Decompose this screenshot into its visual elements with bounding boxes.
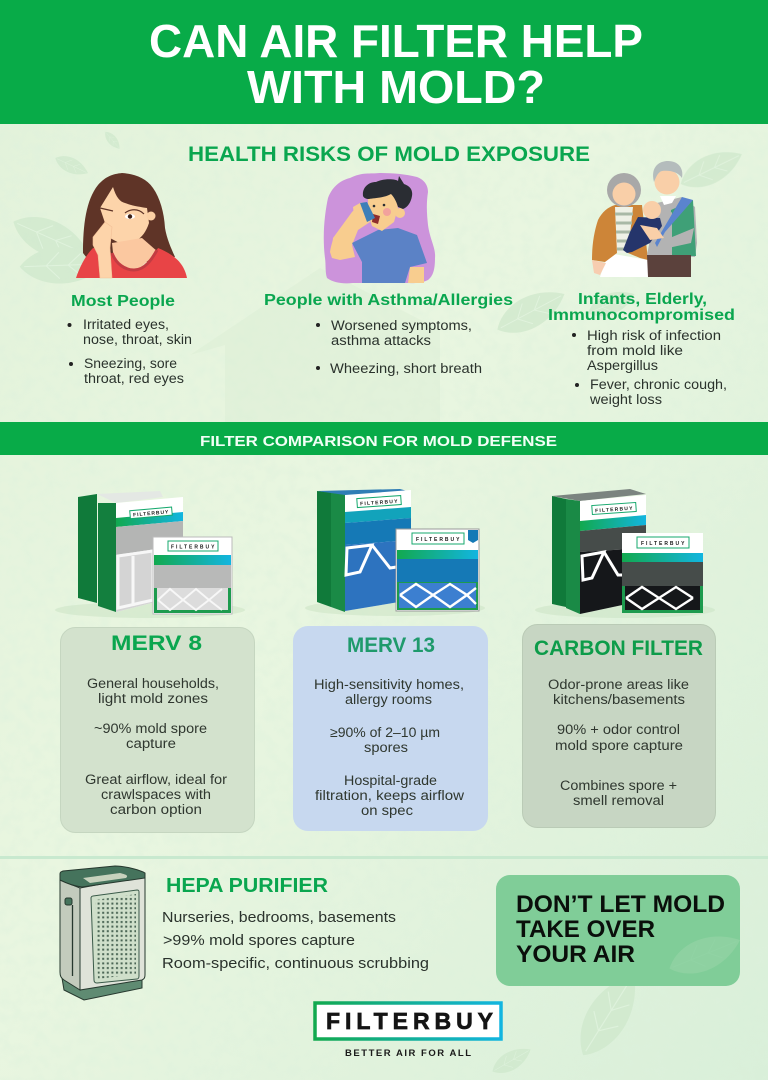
card text: merv 8 [85,676,228,817]
bullet list: vulnerable groups: weight loss [589,392,662,407]
bullet list: most people: throat, red eyes [84,371,184,386]
card text: merv 8: ~90% mold spore [94,721,207,736]
card text: merv 8: carbon option [110,802,202,817]
bullet list: vulnerable groups: Fever, chronic cough, [590,377,727,392]
card text: carbon filter: 90% + odor control [557,722,680,737]
callout: don't let mold take over your air: DON’T LET MOLD [516,891,725,918]
card text: merv 13: Hospital-grade [344,773,437,788]
card text: carbon filter: Combines spore + [560,778,677,793]
card text: merv 8: light mold zones [98,691,208,706]
panel: hepa purifier text [162,875,429,972]
logo: filterbuy: FILTERBUY [326,1008,493,1034]
label: most people: Most People [71,293,175,310]
band heading: FILTER COMPARISON FOR MOLD DEFENSE [200,433,557,450]
card text: carbon filter: kitchens/basements [553,692,685,707]
faint house silhouette [190,268,440,422]
bullet list: vulnerable groups: Aspergillus [587,358,658,373]
header banner [0,0,768,124]
bullet list: most people [68,317,192,386]
product shadows [55,600,715,618]
product image: merv 8 filters: FILTERBUY [171,544,215,550]
heading: health risks: HEALTH RISKS OF MOLD EXPOSURE [188,143,590,166]
label: infants, elderly, immunocompromised: Immunocompromised [548,307,735,324]
bullet list: asthma: Wheezing, short breath [330,361,482,376]
bullet list: asthma: Worsened symptoms, [331,318,472,333]
product image: merv 13 filters: FILTERBUY [360,499,398,507]
card text: merv 13: spores [364,740,408,755]
list: hepa benefits: Nurseries, bedrooms, basements [162,910,396,926]
panel: carbon filter [522,624,716,828]
bullet list: vulnerable groups [572,328,727,407]
card text: merv 13: ≥90% of 2–10 µm [330,725,440,740]
bullet list: most people: nose, throat, skin [83,332,192,347]
card text: carbon filter: Odor-prone areas like [548,677,689,692]
title: CAN AIR FILTER HELP [149,15,643,67]
card text: merv 13 [314,677,464,818]
card text: merv 8: General households, [87,676,219,691]
card text: merv 13: filtration, keeps airflow [315,788,464,803]
product image: carbon filters: FILTERBUY [641,541,685,547]
panel: infants, elderly, immunocompromised [548,161,735,407]
icon: grandparents with baby [592,161,697,277]
bullet list: vulnerable groups: High risk of infection [587,328,721,343]
heading: merv 8: MERV 8 [111,632,202,655]
section band: filter comparison [0,422,768,455]
icon: boy with inhaler [324,173,435,283]
bullet list: asthma: asthma attacks [331,333,431,348]
list: hepa benefits: Room-specific, continuous scrubbing [162,956,429,972]
product image: carbon filters: FILTERBUY [595,506,633,514]
heading: carbon filter: CARBON FILTER [534,637,703,660]
logo: filterbuy: BETTER AIR FOR ALL [345,1048,471,1059]
panel: most people [68,173,192,386]
callout: don't let mold take over your air: YOUR AIR [516,941,635,968]
bullet list: most people: Irritated eyes, [83,317,169,332]
card text: merv 8: Great airflow, ideal for [85,772,228,787]
card text: merv 8: capture [126,736,176,751]
product image: merv 13 filters: FILTERBUY [416,537,460,543]
product image: merv 13 filters [317,489,479,612]
panel: people with asthma [264,173,513,376]
label: people with asthma/allergies: People with Asthma/Allergies [264,292,513,309]
card text: merv 13: on spec [361,803,413,818]
card text: carbon filter [548,677,689,808]
heading: merv 13: MERV 13 [347,634,435,657]
card text: merv 13: High-sensitivity homes, [314,677,464,692]
panel: merv 8 [60,628,254,832]
card text: carbon filter: smell removal [573,793,664,808]
panel: merv 13 [293,626,488,831]
divider [0,856,768,859]
callout: don't let mold take over your air: TAKE OVER [516,916,655,943]
heading: hepa purifier: HEPA PURIFIER [166,875,329,897]
bullet list: vulnerable groups: from mold like [587,343,683,358]
card text: merv 13: allergy rooms [345,692,432,707]
bullet list: most people: Sneezing, sore [84,356,177,371]
icon: hepa air purifier [60,866,145,1000]
bullet list: asthma [316,318,482,376]
list: hepa benefits: >99% mold spores capture [163,933,355,949]
card text: carbon filter: mold spore capture [555,738,683,753]
product image: merv 8 filters: FILTERBUY [133,509,169,518]
card text: merv 8: crawlspaces with [101,787,211,802]
product image: merv 8 filters [78,491,232,614]
product image: carbon filters [552,489,703,614]
icon: woman with irritated eye [76,173,187,278]
list: hepa benefits [162,910,429,972]
callout: don't let mold take over your air [496,875,746,986]
logo: filterbuy [315,1003,501,1059]
label: infants, elderly, immunocompromised [548,291,735,324]
title: WITH MOLD? [247,61,545,113]
title [149,15,643,113]
label: infants, elderly, immunocompromised: Infants, Elderly, [578,291,707,308]
